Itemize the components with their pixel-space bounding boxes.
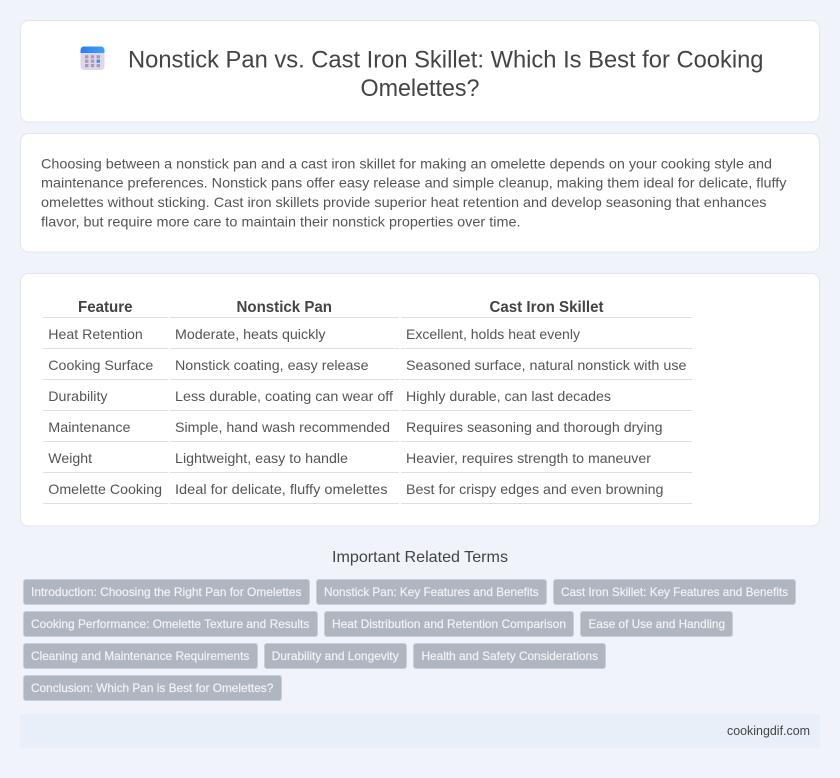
footer source text: cookingdif.com <box>727 723 810 738</box>
tag: nonstick pan features <box>316 580 546 604</box>
intro text block: maintenance preferences. Nonstick pans offer easy release and simple cleanup, making them ideal for delicate, fluffy <box>41 174 786 190</box>
tag: introduction <box>24 580 310 604</box>
heading: important related terms: Important Related Terms <box>332 549 508 566</box>
table row: durability: Less durable, coating can wear off <box>175 388 393 404</box>
tag: introduction: Introduction: Choosing the Right Pan for Omelettes <box>31 585 302 599</box>
table row: durability: Durability <box>48 388 108 404</box>
tag: cooking performance <box>24 612 318 636</box>
panel: comparison table <box>20 274 820 526</box>
tag: conclusion: Conclusion: Which Pan is Best for Omelettes? <box>31 681 274 695</box>
table row: maintenance: Simple, hand wash recommended <box>175 419 390 435</box>
table row: weight: Weight <box>48 450 92 466</box>
title <box>128 47 764 102</box>
table row: weight: Lightweight, easy to handle <box>175 450 348 466</box>
tag: cooking performance: Cooking Performance: Omelette Texture and Results <box>31 617 309 631</box>
tag: heat distribution: Heat Distribution and Retention Comparison <box>332 617 566 631</box>
table row: maintenance: Maintenance <box>48 419 131 435</box>
table row: cooking surface: Nonstick coating, easy release <box>175 357 369 373</box>
tag: ease of use: Ease of Use and Handling <box>588 617 725 631</box>
table row: omelette cooking <box>43 481 692 504</box>
panel: related term tags <box>24 580 796 700</box>
tag: durability: Durability and Longevity <box>272 649 399 663</box>
intro text block: omelettes without sticking. Cast iron skillets provide superior heat retention and develop seasoning that enhances <box>41 194 766 210</box>
intro text block: Choosing between a nonstick pan and a cast iron skillet for making an omelette depends on your cooking style and <box>41 155 772 171</box>
tag: nonstick pan features: Nonstick Pan: Key Features and Benefits <box>324 585 539 599</box>
footer bar <box>20 714 820 748</box>
table row: weight <box>43 450 692 472</box>
table row: cooking surface: Seasoned surface, natural nonstick with use <box>406 357 687 373</box>
tag: durability <box>264 644 406 668</box>
table row: maintenance <box>43 419 692 442</box>
table header: Feature <box>78 299 133 316</box>
intro text block <box>41 155 786 230</box>
table row: omelette cooking: Omelette Cooking <box>48 481 162 497</box>
tag: cast iron features: Cast Iron Skillet: Key Features and Benefits <box>561 585 788 599</box>
table row: cooking surface: Cooking Surface <box>48 357 154 373</box>
title: Omelettes? <box>360 75 480 102</box>
table header: Cast Iron Skillet <box>490 299 604 316</box>
tag: cleaning: Cleaning and Maintenance Requirements <box>31 649 249 663</box>
tag: health and safety <box>414 644 606 668</box>
tag: cleaning <box>24 644 258 668</box>
table row: weight: Heavier, requires strength to maneuver <box>406 450 651 466</box>
tag: heat distribution <box>324 612 574 636</box>
tag: ease of use <box>580 612 732 636</box>
intro text block: flavor, but require more care to maintain their nonstick properties over time. <box>41 214 520 230</box>
panel: intro paragraph <box>20 134 820 252</box>
table row: durability: Highly durable, can last decades <box>406 388 611 404</box>
tag: conclusion <box>24 676 282 700</box>
table row: heat retention: Moderate, heats quickly <box>175 326 326 342</box>
table row: cooking surface <box>43 357 692 380</box>
icon: calendar <box>80 46 104 70</box>
tag: health and safety: Health and Safety Considerations <box>422 649 598 663</box>
title: Nonstick Pan vs. Cast Iron Skillet: Which Is Best for Cooking <box>128 47 764 74</box>
table header: Nonstick Pan <box>236 299 332 316</box>
table row: heat retention <box>43 326 692 348</box>
table row: heat retention: Excellent, holds heat evenly <box>406 326 580 342</box>
table row: heat retention: Heat Retention <box>48 326 143 342</box>
tag: cast iron features <box>554 580 796 604</box>
table row: durability <box>43 388 692 410</box>
panel: title card <box>20 20 820 122</box>
table row: omelette cooking: Ideal for delicate, fluffy omelettes <box>175 481 388 497</box>
table row: omelette cooking: Best for crispy edges and even browning <box>406 481 664 497</box>
table header <box>43 299 692 318</box>
table row: maintenance: Requires seasoning and thorough drying <box>406 419 662 435</box>
